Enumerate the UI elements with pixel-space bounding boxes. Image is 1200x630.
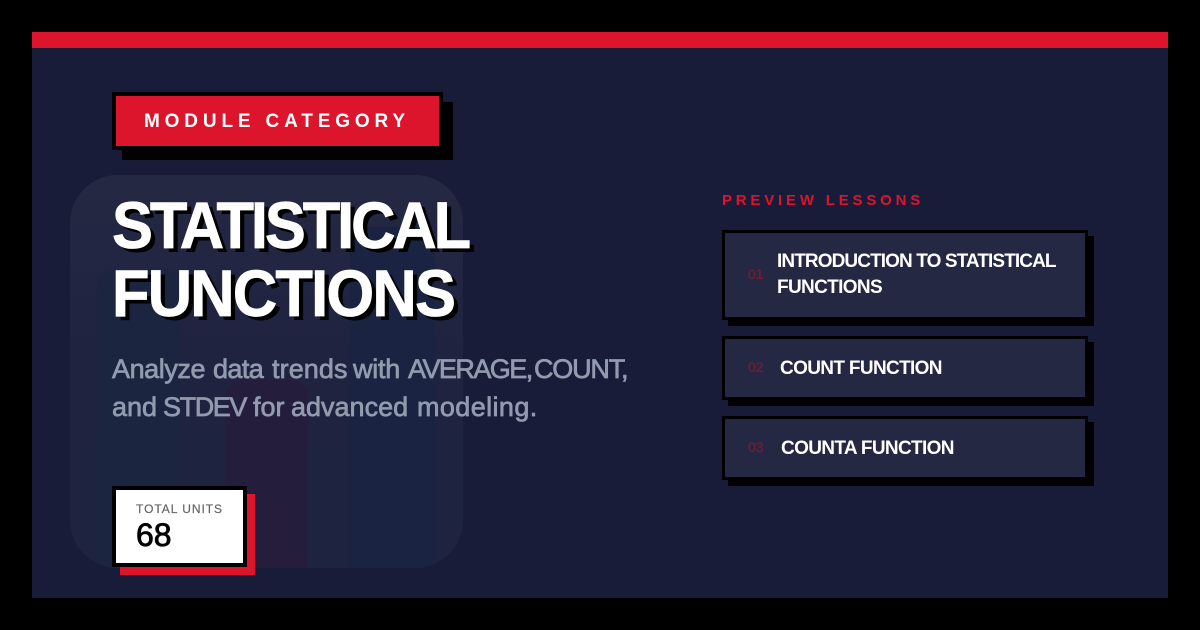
lesson card 1 [722,230,1088,320]
decorative chart panel [70,175,463,568]
title: FUNCTIONS [112,256,454,330]
subtitle: for [253,392,285,422]
lesson number 02: 02 [748,359,764,375]
lesson title 2: COUNT FUNCTION [780,358,942,379]
faint bar: teal [97,270,180,568]
lesson card 3 [722,416,1088,480]
lesson card 2 [722,336,1088,400]
badge: module category [112,92,443,150]
subtitle: modeling. [417,392,538,422]
heading: preview lessons: PREVIEW LESSONS [722,192,924,209]
faint bar: blue [350,227,435,568]
badge label: MODULE CATEGORY [144,111,410,132]
lesson number 03: 03 [748,439,764,455]
subtitle: STDEV [163,392,246,422]
subtitle [112,354,627,422]
top red bar [32,32,1168,48]
title: STATISTICAL [112,188,468,262]
title [112,188,474,330]
subtitle: COUNT, [534,354,627,384]
stat value: 68 [136,517,172,553]
subtitle: trends [272,354,348,384]
lesson title 3: COUNTA FUNCTION [781,438,954,459]
subtitle: AVERAGE, [408,354,532,384]
subtitle: advanced [291,392,408,422]
subtitle: data [213,354,263,384]
subtitle: with [353,354,400,384]
lesson title 1: INTRODUCTION TO STATISTICAL [777,251,1056,272]
lesson title 1 [777,251,1056,298]
stat card: total units [112,486,247,567]
faint bar: red [225,380,308,568]
stat label: TOTAL UNITS [136,502,223,516]
subtitle: and [112,392,157,422]
subtitle: Analyze [112,354,205,384]
lesson title 1: FUNCTIONS [777,277,882,298]
lesson number 01: 01 [748,266,764,282]
